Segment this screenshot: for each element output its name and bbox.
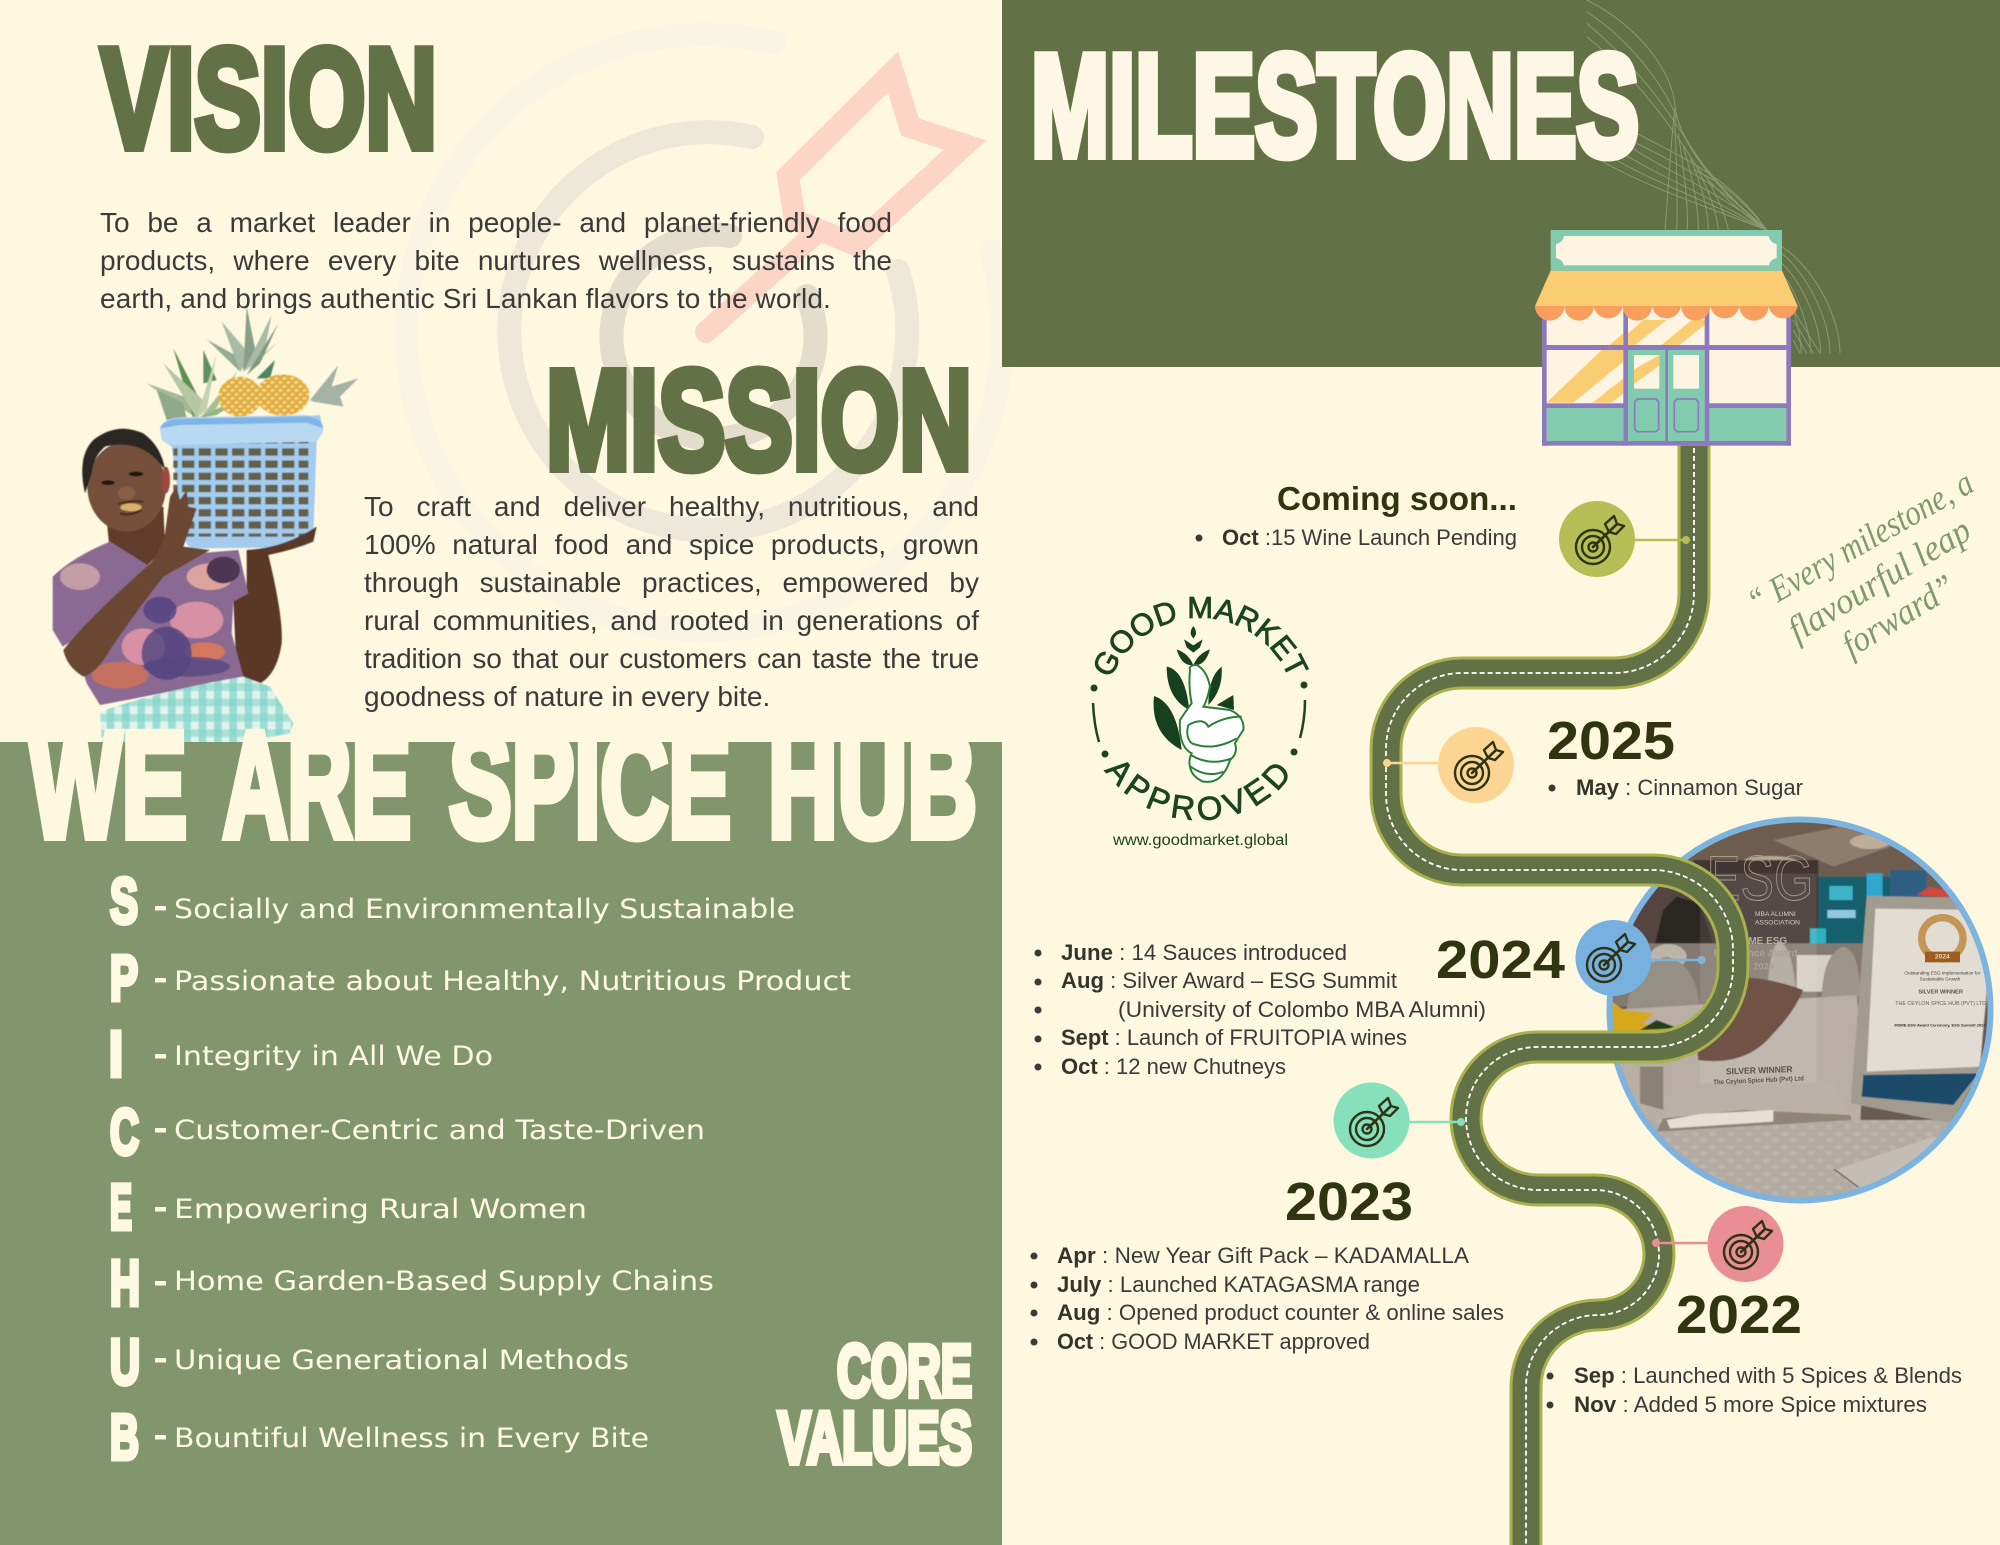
value U: Unique Generational Methods	[174, 1345, 629, 1376]
SPICE HUB acronym list	[109, 865, 851, 1473]
letter U: U	[110, 1326, 140, 1398]
woman left arm and hand	[63, 487, 210, 677]
decorative wave lines	[1587, 0, 1840, 353]
milestone: 2024	[1034, 920, 1706, 1079]
badge url: www.goodmarket.global	[1112, 832, 1288, 849]
text block: mission statement: 100% natural food and spice products, grown	[364, 529, 979, 560]
heading: CORE VALUES: CORE	[837, 1331, 972, 1412]
list: 2025: May : Cinnamon Sugar	[1576, 775, 1803, 800]
year 2024: 2024	[1436, 930, 1565, 990]
winding road timeline	[1386, 440, 1733, 1545]
icon: target on mint circle	[1334, 1082, 1465, 1158]
photo: ESG silver award: The Ceylon Spice Hub (Pvt) Ltd	[1713, 1075, 1804, 1086]
milestone: 2025	[1383, 711, 1803, 803]
badge ring dots and dashes	[1090, 682, 1308, 758]
photo: ESG silver award: ESG	[1707, 844, 1813, 914]
photo: ESG silver award: SILVER WINNER	[1918, 989, 1963, 995]
year 2022: 2022	[1676, 1285, 1802, 1345]
list: 2023: Aug : Opened product counter & online sales	[1057, 1300, 1504, 1325]
letter I: I	[109, 1018, 123, 1090]
quote: every milestone: forward”	[1835, 566, 1962, 665]
letter P: P	[110, 942, 138, 1014]
woman raised arm	[233, 527, 317, 685]
badge ring text: GOOD MARKET	[1094, 596, 1309, 674]
heading: WE ARE SPICE HUB	[29, 700, 977, 868]
list: 2024: Sept : Launch of FRUITOPIA wines	[1061, 1025, 1407, 1050]
quote: every milestone	[1740, 462, 1980, 665]
letter B: B	[110, 1401, 139, 1473]
panel: milestones header band	[1002, 0, 2000, 367]
pineapples	[218, 377, 262, 417]
text block: mission statement: rural communities, and rooted in generations of	[364, 605, 979, 636]
icon: target on blue circle	[1576, 920, 1706, 996]
floral shirt	[53, 542, 248, 705]
photo: ESG silver award: 2024	[1935, 954, 1950, 961]
value P: Passionate about Healthy, Nutritious Product	[174, 966, 851, 997]
photo: ESG silver award: Sustainable Growth	[1920, 977, 1961, 982]
icon: target on peach circle	[1383, 727, 1514, 803]
milestone: 2023	[1030, 1082, 1504, 1354]
list: 2023	[1030, 1243, 1504, 1354]
photo: ESG silver award	[1600, 810, 2000, 1210]
year 2023: 2023	[1285, 1172, 1413, 1232]
basket	[160, 415, 323, 548]
heading: WE ARE SPICE HUB: WE	[29, 700, 187, 868]
photo: ESG silver award: ASSOCIATION	[1755, 920, 1800, 927]
list: 2023: Apr : New Year Gift Pack – KADAMALLA	[1057, 1243, 1469, 1268]
year 2025: 2025	[1547, 711, 1675, 771]
list: 2024: Oct : 12 new Chutneys	[1061, 1054, 1286, 1079]
heading: VISION: VISION	[101, 20, 437, 178]
photo: ESG silver award: THE CEYLON SPICE HUB (PVT) LTD	[1895, 1001, 1986, 1007]
heading: MILESTONES: MILESTONES	[1031, 24, 1639, 186]
letter H: H	[110, 1247, 140, 1319]
woman head	[87, 442, 166, 532]
background watermark: target and arrow	[406, 35, 1002, 631]
list: 2024: June : 14 Sauces introduced	[1061, 940, 1347, 965]
photo: ESG silver award: MBA ALUMNI	[1755, 911, 1796, 918]
text block: mission statement: through sustainable practices, empowered by	[364, 567, 979, 598]
list: 2023: Oct : GOOD MARKET approved	[1057, 1329, 1370, 1354]
heading: CORE VALUES: VALUES	[778, 1398, 972, 1479]
checked sarong	[100, 677, 293, 743]
text block: mission statement: tradition so that our customers can taste the true	[364, 643, 979, 674]
letter S: S	[110, 865, 138, 937]
icon: leaves and thumbs up	[1154, 626, 1243, 782]
photo: ESG silver award: 2024	[1753, 961, 1775, 971]
milestone: 2022	[1546, 1206, 1962, 1417]
heading: WE ARE SPICE HUB: ARE	[223, 700, 411, 868]
icon: target on pink circle	[1652, 1206, 1784, 1282]
text block: mission statement: goodness of nature in every bite.	[364, 681, 770, 712]
badge ring text	[1094, 596, 1309, 820]
list: 2022: Sep : Launched with 5 Spices & Blends	[1574, 1363, 1962, 1388]
milestone: coming soon	[1196, 480, 1690, 577]
list: 2024	[1034, 940, 1486, 1079]
text block: vision statement: earth, and brings authentic Sri Lankan flavors to the world.	[100, 283, 831, 314]
heading: WE ARE SPICE HUB: HUB	[768, 700, 977, 868]
photo: ESG silver award: Outstanding ESG implementation for	[1904, 971, 1981, 976]
list: 2024: (University of Colombo MBA Alumni)	[1118, 997, 1486, 1022]
value B: Bountiful Wellness in Every Bite	[174, 1423, 649, 1454]
photo: ESG silver award: Excellence Award	[1713, 949, 1798, 960]
pineapple leaves	[147, 307, 358, 420]
letter C: C	[110, 1096, 139, 1168]
photo: ESG silver award: ME ESG	[1748, 936, 1787, 947]
heading: coming soon: Coming soon...	[1277, 480, 1517, 517]
list: 2023: July : Launched KATAGASMA range	[1057, 1272, 1420, 1297]
woman neck	[107, 507, 165, 570]
heading: MISSION: MISSION	[546, 340, 972, 498]
badge ring text: APPROVED	[1104, 762, 1288, 820]
list: coming soon: Oct :15 Wine Launch Pending	[1222, 525, 1517, 550]
woman face details	[101, 472, 143, 514]
list: 2024: Aug : Silver Award – ESG Summit	[1061, 968, 1397, 993]
storefront illustration	[1535, 230, 1798, 446]
photo: ESG silver award: SILVER WINNER	[1726, 1064, 1793, 1076]
heading: WE ARE SPICE HUB: SPICE	[449, 700, 731, 868]
quote: every milestone: flavourful leap	[1781, 509, 1978, 650]
text block: vision statement: To be a market leader in people- and planet-friendly food	[100, 207, 892, 238]
woman hair	[82, 429, 165, 493]
text block: vision statement: products, where every bite nurtures wellness, sustains the	[100, 245, 892, 276]
text block: vision statement	[100, 207, 892, 314]
badge: good market approved	[1090, 596, 1309, 849]
value E: Empowering Rural Women	[174, 1194, 587, 1225]
icon: target on green circle	[1559, 501, 1690, 577]
value H: Home Garden-Based Supply Chains	[174, 1266, 714, 1297]
list: 2022: Nov : Added 5 more Spice mixtures	[1574, 1392, 1927, 1417]
photo: rural woman carrying a basket of pineapples	[53, 307, 358, 743]
list: 2022	[1546, 1363, 1962, 1417]
value I: Integrity in All We Do	[174, 1041, 493, 1072]
heading: CORE VALUES	[778, 1331, 972, 1479]
value S: Socially and Environmentally Sustainable	[174, 894, 795, 925]
value C: Customer-Centric and Taste-Driven	[174, 1115, 705, 1146]
text block: mission statement	[364, 491, 980, 712]
letter E: E	[110, 1171, 132, 1243]
text block: mission statement: To craft and deliver healthy, nutritious, and	[364, 491, 979, 522]
photo: ESG silver award: MSME ESG Award Ceremony, ESG Summit 2024	[1894, 1023, 1986, 1028]
panel: core values band	[0, 742, 1002, 1545]
